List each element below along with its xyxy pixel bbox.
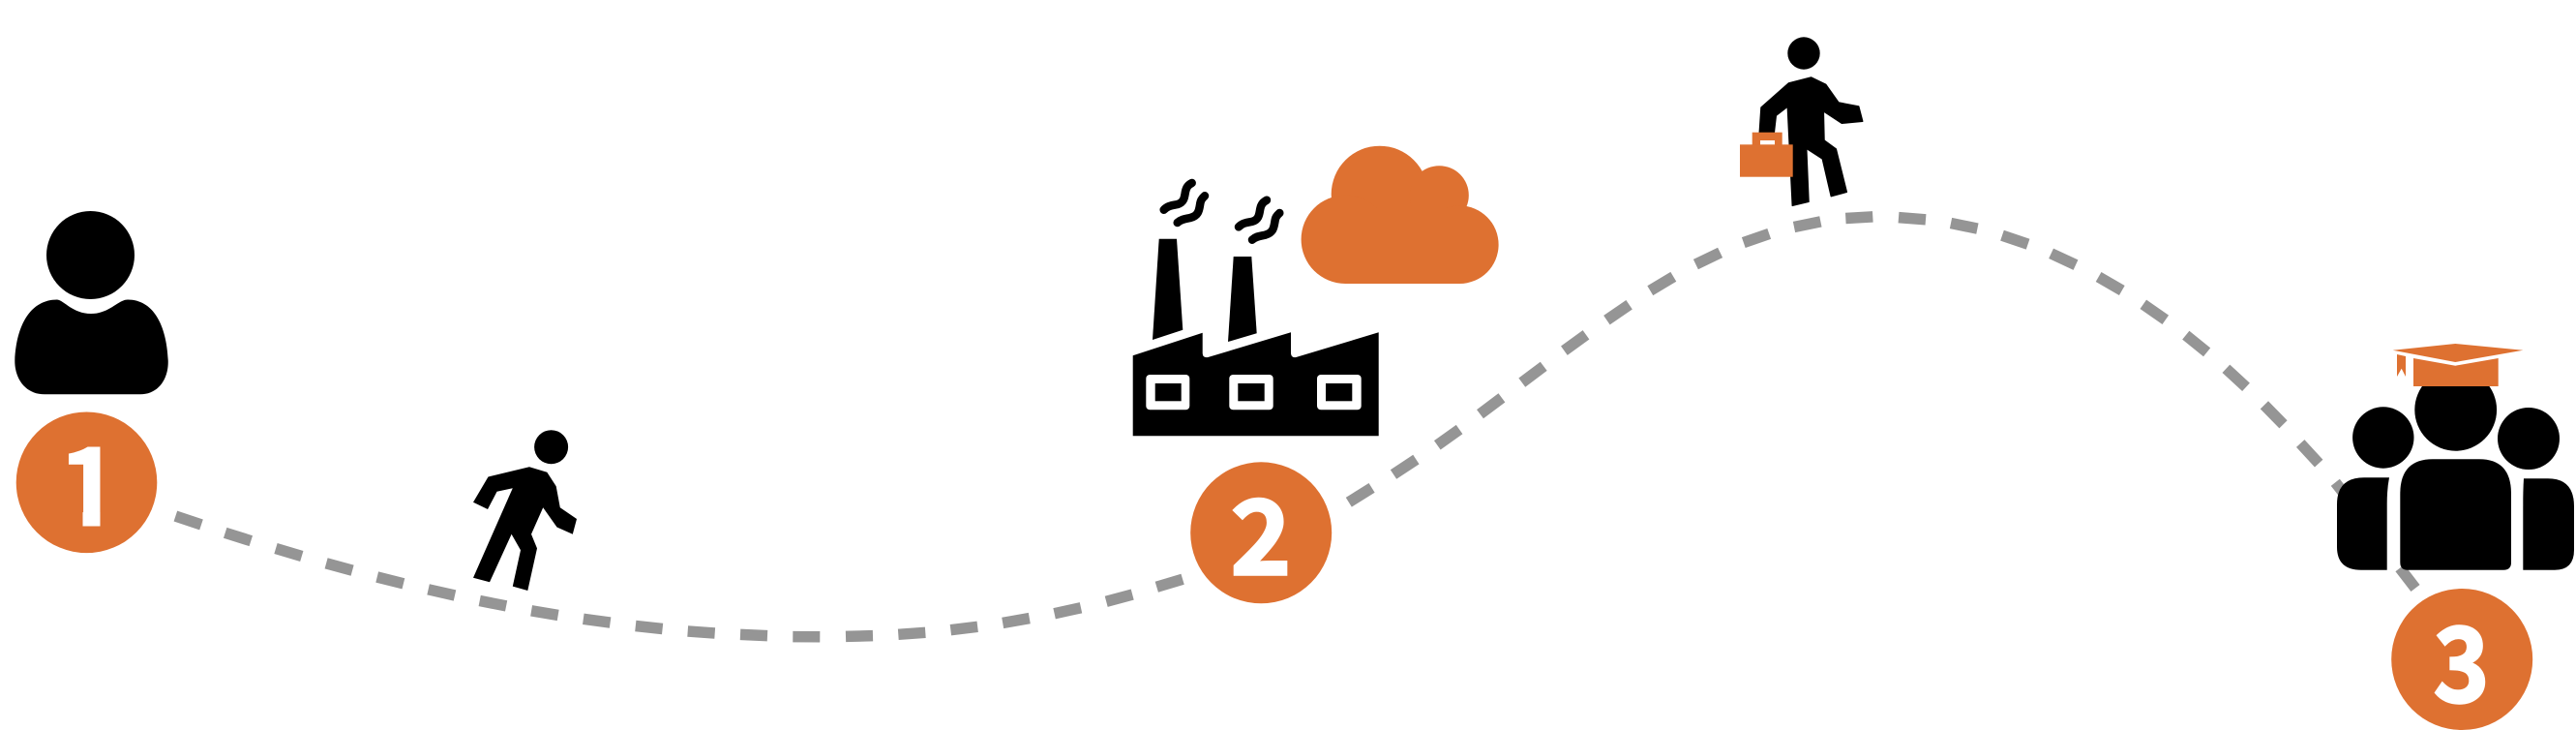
graduation cap: [2393, 344, 2523, 386]
dashed journey path: [175, 217, 2415, 637]
step 3 badge: 3: [2433, 582, 2490, 730]
factory building: [1133, 332, 1379, 436]
icon: person (step 1): [15, 211, 168, 394]
factory chimneys: [1153, 239, 1257, 342]
icon: person with briefcase: [1740, 37, 1863, 205]
step 3 badge: [2391, 582, 2532, 730]
step 2 badge: [1190, 454, 1332, 604]
left person: [2337, 407, 2413, 570]
step 1 badge: [16, 401, 157, 558]
icon: factory: [1133, 183, 1379, 436]
icon: walking person: [473, 430, 577, 591]
worker figure: [1759, 37, 1863, 205]
factory smoke: [1164, 183, 1279, 240]
icon: graduate group: [2337, 344, 2574, 570]
centre person: [2400, 369, 2511, 570]
briefcase: [1740, 133, 1793, 177]
step 1 badge: 1: [57, 401, 122, 558]
step 2 badge: 2: [1230, 454, 1292, 604]
icon: cloud: [1302, 146, 1499, 284]
factory windows: [1146, 375, 1362, 410]
right person: [2498, 408, 2574, 570]
